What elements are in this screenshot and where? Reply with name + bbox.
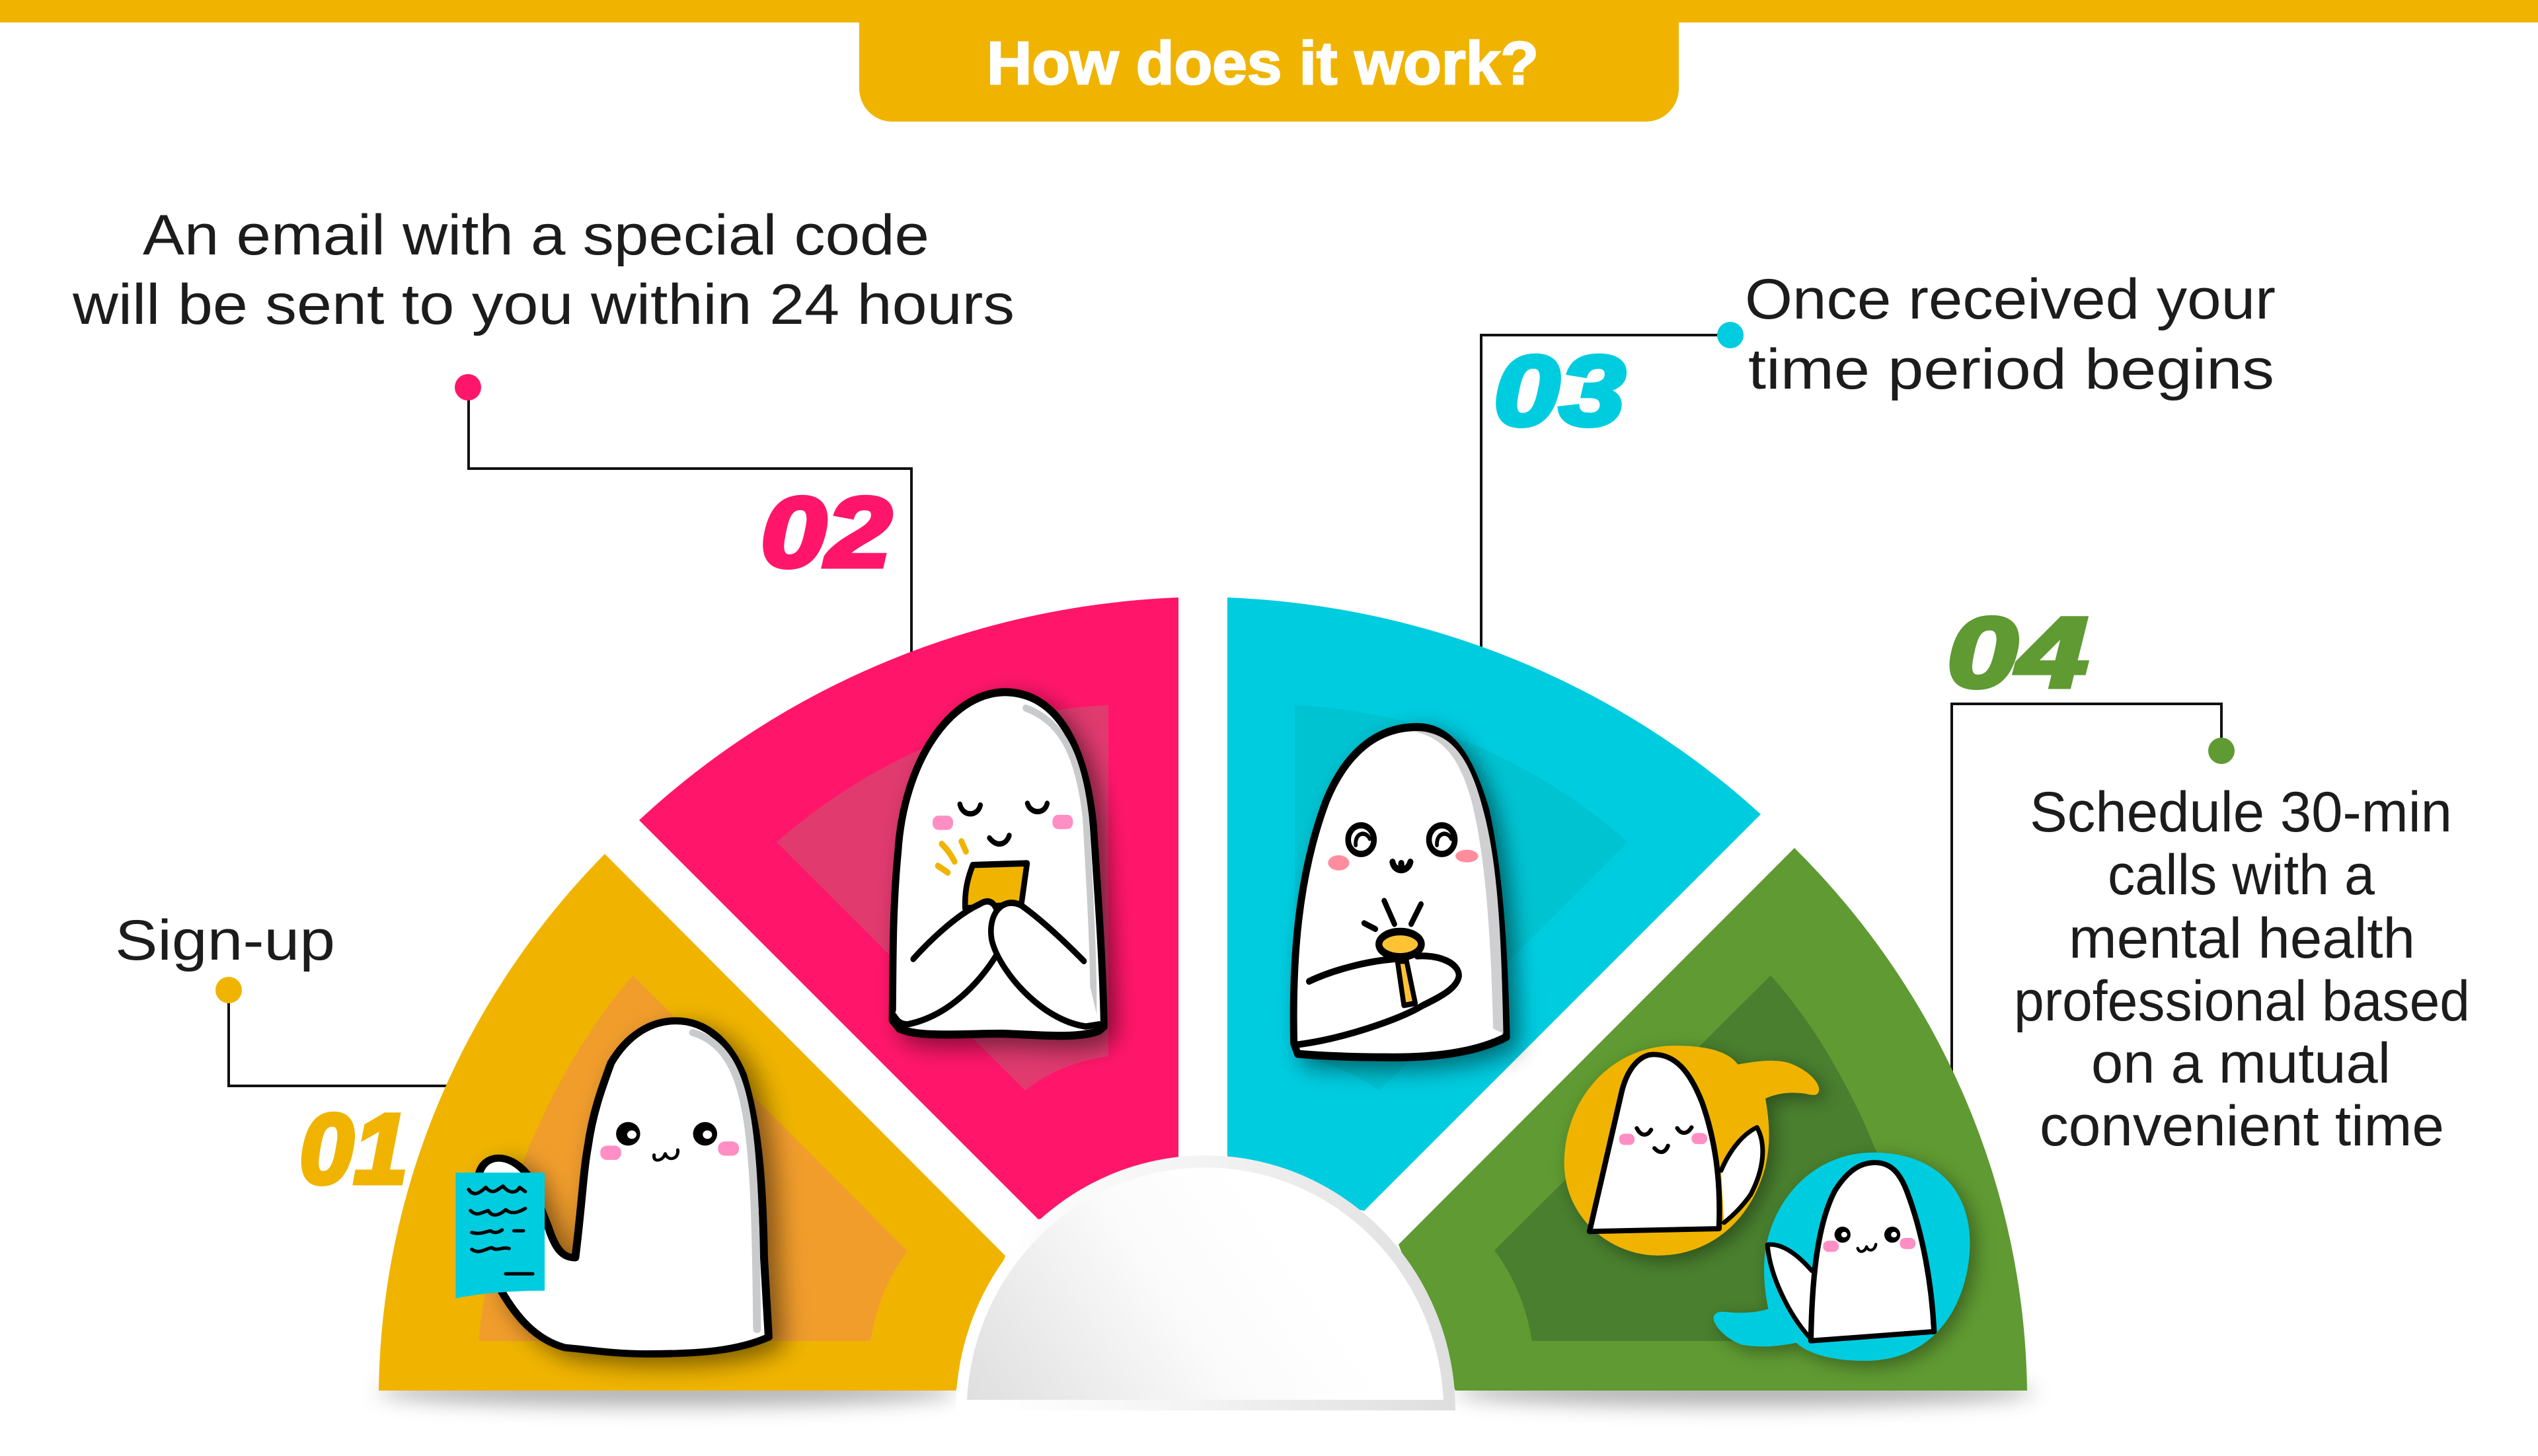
text: step 03: time period begins [1748, 338, 2274, 401]
ghost in yellow bubble [1590, 1054, 1763, 1231]
segment 03: cyan [1227, 597, 1761, 1211]
number 03: 03 [1494, 335, 1625, 446]
text: step 04: on a mutual [2091, 1032, 2391, 1095]
text: step 04: calls with a [2108, 843, 2375, 907]
icon: yellow speech bubble [1564, 1046, 1819, 1256]
character 01: ghost holding a paper [455, 1021, 769, 1354]
header bar with tab [0, 0, 2538, 122]
connector: step 03 [1481, 322, 1744, 648]
text: step 02: An email with a special code [143, 204, 929, 267]
character 04: two ghosts in speech bubbles [1564, 1046, 1970, 1361]
text: step 04: convenient time [2040, 1094, 2444, 1158]
title: How does it work? [987, 30, 1539, 97]
connector: step 01 [215, 977, 456, 1086]
text: step 02: will be sent to you within 24 hours [72, 273, 1015, 336]
segment 02: pink [639, 597, 1178, 1219]
text: step 04: professional based [2014, 970, 2470, 1033]
number 02: 02 [761, 477, 892, 588]
number 04: 04 [1947, 597, 2088, 708]
segment 01: yellow [379, 854, 1005, 1391]
text: step 04: Schedule 30-min [2030, 781, 2452, 844]
icon: arm and ring [1297, 932, 1459, 1045]
character 03: ghost with ring [1293, 727, 1506, 1057]
connector: step 02 [455, 374, 911, 654]
fan ground shadow [377, 1377, 2036, 1406]
text: step 02 [72, 204, 1015, 336]
segment 04: green [1399, 848, 2027, 1391]
ghost in blue bubble [1767, 1163, 1934, 1341]
character 02: ghost with phone [892, 692, 1104, 1036]
icon: blue speech bubble [1713, 1153, 1970, 1361]
text: step 04: mental health [2069, 907, 2415, 970]
icon: yellow phone [965, 863, 1027, 908]
number 01: 01 [299, 1093, 408, 1204]
connector: step 04 [1952, 704, 2235, 1084]
center dome [956, 1155, 1455, 1410]
text: step 03 [1745, 268, 2276, 401]
icon: blue paper [455, 1172, 545, 1298]
text: step 01: Sign-up [115, 909, 335, 972]
text: step 04 [2014, 781, 2470, 1158]
text: step 03: Once received your [1745, 268, 2276, 331]
